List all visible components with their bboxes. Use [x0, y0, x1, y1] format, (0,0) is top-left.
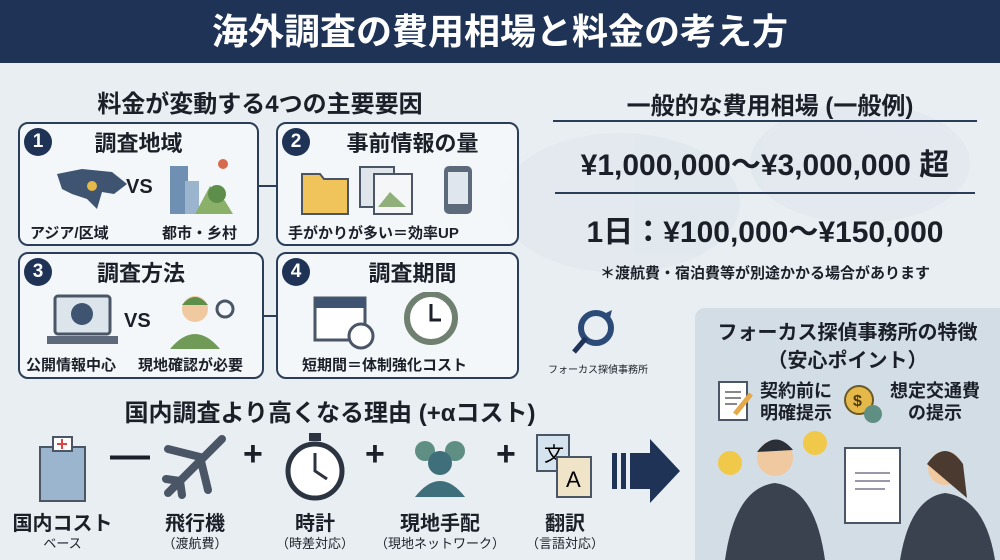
panel: focus features: の提示 — [908, 403, 962, 423]
panel 3: method: 3 — [33, 261, 43, 282]
panel 2: info: 2 — [291, 131, 301, 152]
panel 2: info: 事前情報の量 — [346, 131, 478, 156]
cost row: + — [365, 435, 385, 473]
illustration: consultants — [718, 431, 995, 560]
icon: asia map — [57, 169, 127, 209]
panel 2: info — [276, 122, 519, 246]
cost row: （渡航費） — [162, 536, 228, 551]
icon: coins: $ — [853, 393, 862, 410]
panel 3: method: VS — [124, 310, 151, 332]
panel: focus features: （安心ポイント） — [768, 350, 928, 372]
panel 1: region: 調査地域 — [94, 131, 182, 156]
cost row — [12, 433, 680, 551]
panel: focus features — [695, 308, 1000, 560]
heading: general cost: 一般的な費用相場 (一般例) — [627, 93, 913, 120]
daily price: 1日：¥100,000〜¥150,000 — [587, 216, 943, 249]
panel 4: period — [276, 252, 519, 379]
panel: focus features: フォーカス探偵事務所の特徴 — [718, 322, 978, 344]
icon: coins — [844, 385, 882, 423]
icon: translate: 文 — [544, 438, 564, 467]
logo — [548, 310, 648, 376]
icon: stopwatch — [286, 433, 344, 500]
panel 3: method: 調査方法 — [97, 261, 185, 286]
title bar — [0, 0, 1000, 63]
cost row: + — [496, 435, 516, 473]
icon: translate: A — [566, 467, 581, 492]
cost row: （現地ネットワーク） — [375, 536, 505, 551]
icon: calendar and clock — [314, 292, 458, 350]
cost row: 国内コスト — [12, 513, 112, 535]
heading: factors: 料金が変動する4つの主要要因 — [97, 91, 423, 118]
icon: city and village — [170, 159, 233, 214]
cost row: 時計 — [295, 513, 335, 535]
cost row: （時差対応） — [276, 536, 354, 551]
cost row: ベース — [43, 536, 82, 551]
icon: folder photos phone — [301, 166, 472, 215]
connectors — [259, 185, 276, 317]
icon: contract — [718, 381, 753, 421]
icon: airplane — [162, 435, 226, 499]
panel 4: period: 調査期間 — [368, 261, 456, 286]
panel 3: method: 現地確認が必要 — [138, 357, 243, 374]
logo: フォーカス探偵事務所 — [548, 365, 648, 376]
title bar: 海外調査の費用相場と料金の考え方 — [212, 11, 788, 52]
icon: people — [415, 441, 465, 497]
panel 4: period: 短期間＝体制強化コスト — [302, 357, 467, 374]
panel 1: region: 1 — [33, 131, 43, 152]
cost row: 飛行機 — [165, 513, 225, 535]
panel: focus features: 契約前に — [760, 381, 832, 401]
cost row: — — [110, 433, 150, 477]
note: ＊渡航費・宿泊費等が別途かかる場合があります — [600, 265, 930, 282]
panel 1: region: アジア/区域 — [30, 225, 109, 242]
cost row: + — [243, 435, 263, 473]
icon: translate — [536, 434, 592, 498]
icon: laptop — [47, 294, 118, 344]
cost row: （言語対応） — [526, 536, 604, 551]
icon: investigator — [170, 296, 234, 349]
panel: focus features: 想定交通費 — [890, 381, 980, 401]
price range: ¥1,000,000〜¥3,000,000 超 — [581, 149, 949, 182]
cost row: 現地手配 — [400, 513, 480, 535]
panel 2: info: 手がかりが多い＝効率UP — [288, 225, 459, 242]
heading: extra cost: 国内調査より高くなる理由 (+αコスト) — [125, 400, 535, 427]
panel 3: method: 公開情報中心 — [26, 357, 116, 374]
panel 4: period: 4 — [291, 261, 301, 282]
panel: focus features: 明確提示 — [760, 403, 832, 423]
cost row: 翻訳 — [545, 513, 585, 535]
arrow — [612, 439, 680, 503]
panel 3: method — [18, 252, 264, 379]
icon: building — [39, 436, 86, 502]
panel 1: region: 都市・乡村 — [162, 225, 237, 242]
panel 1: region: VS — [126, 176, 153, 198]
panel 1: region — [18, 122, 259, 246]
